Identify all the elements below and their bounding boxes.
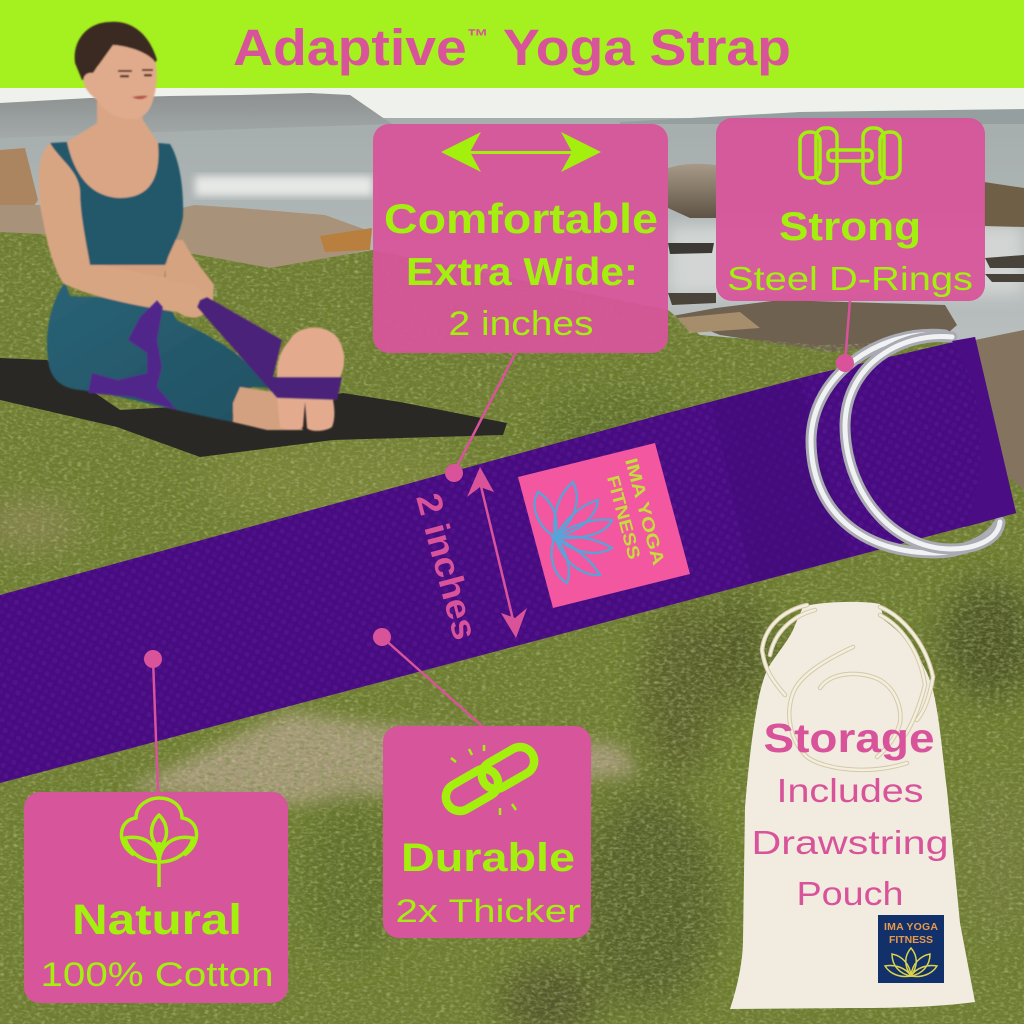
strap brand tag — [518, 443, 690, 608]
panel: durable — [383, 726, 591, 938]
heading: Natural — [72, 896, 242, 944]
dimension arrow: 2 inches — [467, 467, 527, 638]
icon: double arrow — [441, 132, 601, 172]
hair — [75, 22, 157, 80]
leggings — [47, 282, 270, 422]
yoga mat — [0, 358, 507, 457]
panel: strong — [716, 118, 985, 301]
left arm — [38, 143, 213, 318]
title: ™ — [467, 26, 489, 48]
subtext: Pouch — [796, 875, 904, 912]
tag text: FITNESS — [603, 473, 645, 561]
callout: connector lines and dots — [144, 300, 854, 792]
heading: Strong — [779, 205, 921, 249]
heading: Durable — [401, 836, 575, 880]
heading: Comfortable — [384, 195, 658, 242]
subtext: 100% Cotton — [40, 956, 274, 994]
feet soles — [277, 328, 344, 431]
face details — [118, 69, 153, 78]
icon: cotton plant — [121, 798, 197, 887]
right arm — [165, 240, 214, 300]
drawstrings — [762, 605, 933, 770]
pouch brand label — [878, 915, 944, 983]
title: Adaptive — [233, 19, 448, 76]
icon: lotus on tag — [535, 482, 612, 583]
purple strap close-up — [0, 334, 1016, 783]
strap tail over rings — [952, 337, 1016, 527]
woman doing a seated stretch with the strap — [38, 22, 344, 431]
drawstring storage pouch — [730, 602, 975, 1009]
panel: comfortable extra wide: Extra Wide: — [406, 251, 638, 294]
heels and ankles — [233, 387, 303, 430]
strap at hip — [88, 300, 177, 410]
dried ground patches — [125, 712, 640, 805]
tag text — [600, 456, 669, 573]
subtext — [752, 772, 948, 912]
subtext: 2 inches — [448, 305, 594, 343]
grass — [0, 232, 1024, 1024]
dimension label: 2 inches — [408, 489, 485, 644]
strap around feet — [197, 297, 342, 400]
face — [83, 45, 157, 119]
waist — [90, 262, 166, 280]
heading: Storage — [764, 715, 934, 761]
subtext: 2x Thicker — [396, 893, 581, 929]
crop top — [50, 142, 183, 265]
icon: gold lotus — [885, 948, 937, 977]
tag text: IMA YOGA — [621, 456, 669, 568]
subtext: Steel D-Rings — [727, 260, 973, 297]
neck and chest — [67, 97, 158, 198]
subtext: Drawstring — [752, 824, 948, 861]
header banner — [0, 0, 1024, 88]
pouch brand label: IMA YOGA — [884, 921, 938, 933]
panel: comfortable extra wide — [373, 124, 668, 353]
grass tone patches — [200, 390, 1024, 1024]
icon: dumbbell — [800, 128, 900, 183]
pouch brand label: FITNESS — [889, 934, 933, 946]
D-rings — [811, 334, 1000, 553]
icon: chain link — [441, 742, 539, 816]
subtext: Includes — [776, 772, 924, 809]
panel: natural — [24, 792, 288, 1003]
title: Yoga Strap — [489, 19, 791, 76]
